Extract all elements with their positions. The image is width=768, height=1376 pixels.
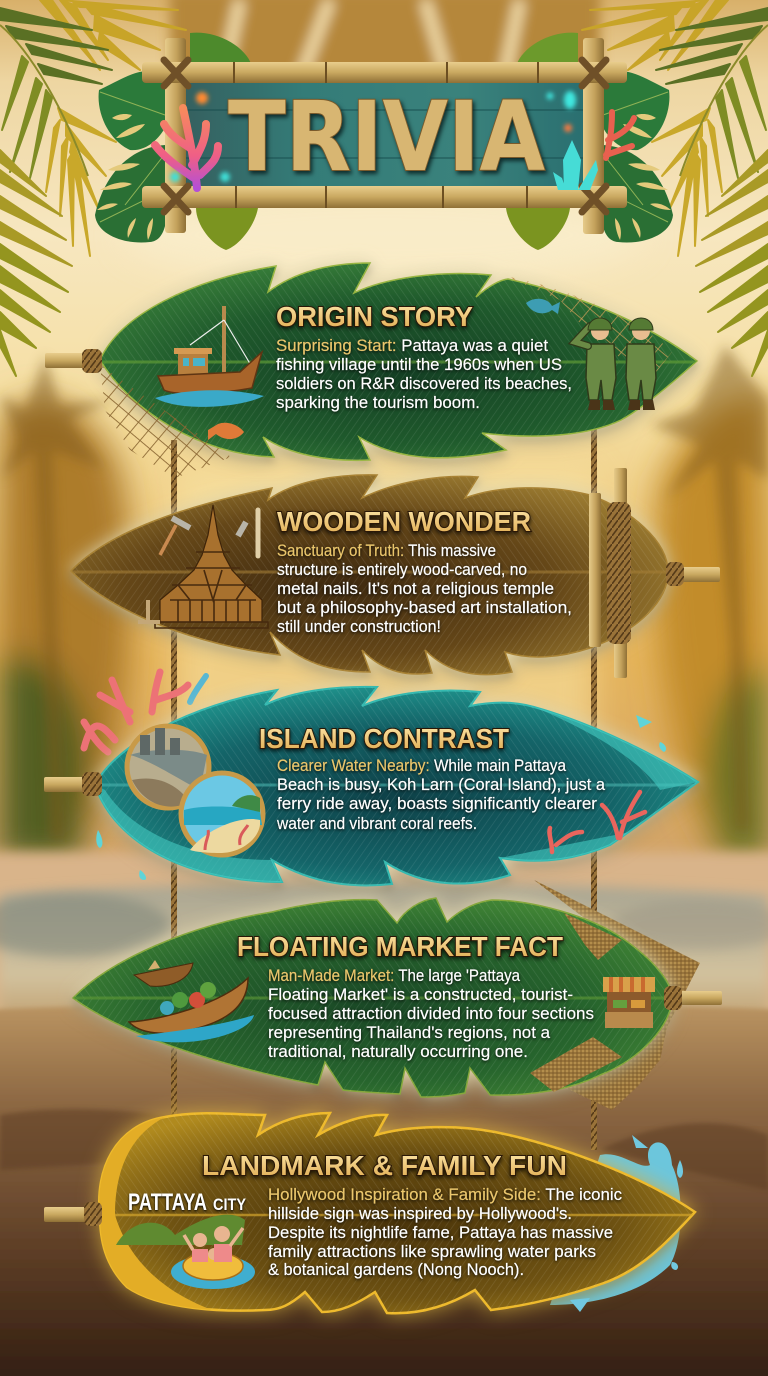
heading: FLOATING MARKET FACT	[237, 931, 563, 962]
burlap behind leaf	[534, 880, 700, 1110]
monstera leaves	[95, 33, 673, 250]
blurred palm silhouettes	[0, 345, 768, 840]
panel: island contrast	[44, 672, 700, 887]
panel: origin story	[45, 260, 710, 478]
text block: & botanical gardens (Nong Nooch).	[268, 1260, 524, 1279]
icon: market stall	[603, 977, 655, 1028]
glowing lights	[170, 91, 576, 182]
icon: orange fish	[208, 423, 244, 440]
text block: water and vibrant coral reefs.	[276, 814, 477, 833]
panel: landmark and family fun	[44, 1110, 695, 1323]
heading: ISLAND CONTRAST	[259, 723, 509, 754]
text block: but a philosophy-based art installation,	[277, 598, 572, 617]
icon: wooden temple	[138, 505, 268, 628]
sand dunes	[0, 1109, 768, 1190]
panel: floating market fact	[70, 880, 722, 1110]
text block	[268, 1185, 622, 1279]
text block: Man-Made Market: The large 'Pattaya	[268, 966, 520, 985]
text block	[276, 756, 606, 833]
icon: clear beach circle	[181, 773, 263, 855]
small coral right	[606, 112, 634, 158]
palm fronds top left	[0, 0, 186, 376]
heading: WOODEN WONDER	[277, 506, 531, 537]
burlap top patch	[564, 913, 622, 960]
stem	[650, 991, 722, 1005]
text block: Floating Market' is a constructed, tourist-	[268, 985, 573, 1004]
coral	[155, 108, 218, 188]
title sign	[95, 33, 673, 250]
text block: traditional, naturally occurring one.	[268, 1042, 528, 1061]
text block: fishing village until the 1960s when US	[276, 355, 562, 374]
text block: family attractions like sprawling water parks	[268, 1242, 596, 1261]
text block	[276, 336, 572, 412]
bamboo and rope binding	[589, 468, 684, 678]
heading: LANDMARK & FAMILY FUN	[202, 1150, 567, 1181]
blue coral	[190, 676, 206, 702]
water splash right	[550, 1142, 681, 1305]
text block: still under construction!	[277, 617, 441, 636]
text block: Clearer Water Nearby: While main Pattaya	[277, 756, 566, 775]
stem	[45, 353, 115, 368]
blurred left jungle	[0, 400, 131, 860]
text block: Sanctuary of Truth: This massive	[277, 541, 496, 560]
icon: market boats	[129, 960, 254, 1042]
stem	[44, 777, 104, 792]
top palm shadows	[170, 0, 600, 90]
text block: Surprising Start: Pattaya was a quiet	[276, 336, 548, 355]
text block: Beach is busy, Koh Larn (Coral Island), just a	[277, 775, 606, 794]
fishing net top right	[505, 276, 672, 380]
icon: coral right	[549, 792, 645, 852]
icon: soldiers	[575, 318, 656, 410]
text block	[268, 966, 594, 1061]
text block: ferry ride away, boasts significantly clearer	[277, 794, 597, 813]
text block: hillside sign was inspired by Hollywood's.	[268, 1204, 572, 1223]
burlap bottom patch	[530, 1037, 622, 1092]
water splash	[96, 715, 666, 880]
text block: Hollywood Inspiration & Family Side: The iconic	[268, 1185, 622, 1204]
icon: fishing boat	[155, 306, 264, 407]
panel: wooden wonder	[70, 468, 720, 678]
leaf	[99, 1113, 695, 1313]
text block: soldiers on R&R discovered its beaches,	[276, 374, 572, 393]
center glow	[175, 470, 595, 870]
icon: pattaya city sign and family tube: PATTAYA	[128, 1189, 207, 1216]
rope knot	[84, 1202, 102, 1226]
title text: TRIVIA	[228, 81, 545, 193]
leaf	[100, 263, 697, 460]
water drops	[570, 1135, 683, 1312]
palm fronds top right	[582, 0, 768, 376]
rope knot	[82, 772, 102, 796]
leaf	[71, 475, 668, 675]
blurred right jungle	[654, 397, 768, 860]
heading: ORIGIN STORY	[276, 301, 473, 332]
coral behind leaf	[84, 672, 188, 752]
water edges	[95, 707, 698, 882]
text block: representing Thailand's regions, not a	[268, 1023, 551, 1042]
beach	[0, 852, 768, 1376]
icon: busy beach circle	[127, 726, 209, 808]
crystal	[553, 140, 598, 190]
fishing net bottom left	[100, 365, 231, 478]
icon: blue fish	[526, 299, 560, 314]
text block: Despite its nightlife fame, Pattaya has massive	[268, 1223, 613, 1242]
text block: sparking the tourism boom.	[276, 393, 480, 412]
icon: pattaya city sign and family tube: CITY	[213, 1195, 247, 1214]
leaf	[73, 898, 672, 1097]
teal board	[184, 82, 584, 188]
rope knot	[664, 986, 682, 1010]
bamboo frame	[142, 38, 627, 234]
leaf	[95, 687, 698, 885]
text block: focused attraction divided into four sections	[268, 1004, 594, 1023]
rope knot	[82, 349, 102, 373]
text block: metal nails. It's not a religious temple	[277, 579, 554, 598]
hanging ropes	[171, 425, 597, 1150]
icon: pattaya city sign and family tube	[116, 1189, 255, 1289]
text block	[277, 541, 572, 636]
text block: structure is entirely wood-carved, no	[277, 560, 527, 579]
stem	[44, 1207, 106, 1222]
stem	[640, 567, 720, 582]
